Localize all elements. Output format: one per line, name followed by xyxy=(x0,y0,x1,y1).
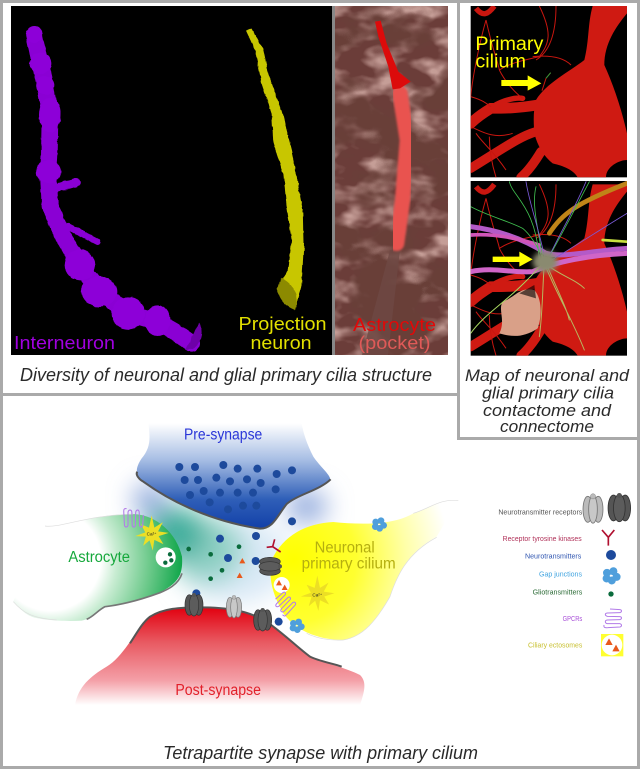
label: Primary cilium: cilium xyxy=(475,52,526,73)
glow: synaptic cleft xyxy=(133,483,327,603)
label: Primary cilium: Primary xyxy=(475,34,544,55)
panel: tetrapartite synapse xyxy=(13,423,631,763)
legend xyxy=(498,493,631,656)
panel: cilia structure diversity xyxy=(11,6,448,385)
legend row: gap junctions xyxy=(539,567,621,584)
label: Primary cilium xyxy=(475,34,544,73)
receptor: on cilium xyxy=(259,557,282,575)
label: Neuronal primary cilium xyxy=(302,539,396,573)
receptor tyrosine kinase xyxy=(267,539,281,552)
label: Projection neuron: Projection xyxy=(238,313,326,334)
legend row: neurotransmitters: Neurotransmitters xyxy=(525,552,581,561)
legend row: GPCRs: GPCRs xyxy=(563,614,582,623)
diagram: synapse xyxy=(13,423,458,705)
image: interneuron cilium xyxy=(26,26,202,350)
label: Neuronal primary cilium: primary cilium xyxy=(302,556,396,573)
gliotransmitters xyxy=(186,544,241,581)
label: Interneuron: Interneuron xyxy=(14,333,115,353)
caption: diversity: Diversity of neuronal and glial primary cilia structure xyxy=(20,365,432,385)
label: Astrocyte (pocket) xyxy=(353,315,436,353)
shape: post-synapse xyxy=(75,607,364,705)
shape: neuronal primary cilium xyxy=(270,500,458,640)
arrow: yellow xyxy=(501,75,541,91)
legend row: neurotransmitters xyxy=(525,550,616,561)
vesicle: ciliary ectosome xyxy=(274,577,290,593)
gap junction: bottom xyxy=(290,619,305,633)
label: Astrocyte (pocket): (pocket) xyxy=(358,333,430,353)
shape: pre-synapse xyxy=(137,423,330,529)
legend row: neurotransmitter receptors xyxy=(498,493,631,523)
image: neuron with primary cilium xyxy=(471,6,627,177)
GPCR: cilium xyxy=(271,591,297,617)
neurotransmitters: in cleft xyxy=(192,517,296,626)
calcium star: astrocyte xyxy=(135,515,169,551)
caption: contactome and connectome: connectome xyxy=(500,417,594,436)
image: projection neuron cilium xyxy=(246,28,304,310)
legend row: receptor tyrosine kinases: Receptor tyrosine kinases xyxy=(503,534,582,543)
caption: contactome and connectome xyxy=(465,366,630,436)
label: Pre-synapse: Pre-synapse xyxy=(184,427,262,444)
arrow: yellow xyxy=(493,252,533,267)
label: Post-synapse: Post-synapse xyxy=(175,682,261,699)
label: Projection neuron: neuron xyxy=(250,332,312,353)
caption: contactome and connectome: contactome and xyxy=(483,401,612,420)
calcium star: cilium xyxy=(301,576,334,611)
label: Projection neuron xyxy=(238,313,326,353)
calcium star: astrocyte: Ca²⁺ xyxy=(147,531,157,536)
legend row: ciliary ectosomes xyxy=(528,634,623,656)
image: astrocyte cilium in pocket xyxy=(375,21,411,243)
legend row: gliotransmitters: Gliotransmitters xyxy=(533,587,582,596)
legend row: receptor tyrosine kinases xyxy=(503,530,614,546)
label: Neuronal primary cilium: Neuronal xyxy=(315,539,375,556)
vesicle: astrocyte gliotransmitters xyxy=(156,547,176,567)
image: neuron with contact map xyxy=(471,181,627,356)
legend row: gap junctions: Gap junctions xyxy=(539,570,582,579)
shape: astrocyte xyxy=(13,514,182,621)
legend row: neurotransmitter receptors: Neurotransmitter receptors xyxy=(498,508,582,517)
calcium star: cilium: Ca²⁺ xyxy=(312,592,323,597)
legend row: ciliary ectosomes: Ciliary ectosomes xyxy=(528,641,582,650)
label: Astrocyte: Astrocyte xyxy=(68,549,130,566)
gap junction: top xyxy=(372,517,387,532)
panel: contactome and connectome map xyxy=(465,6,630,436)
caption: tetrapartite synapse: Tetrapartite synapse with primary cilium xyxy=(163,743,478,763)
legend row: GPCRs xyxy=(563,609,621,628)
GPCR: astrocyte xyxy=(124,509,143,527)
caption: contactome and connectome: glial primary cilia xyxy=(482,384,614,402)
image: black 3D reconstruction field xyxy=(11,6,332,355)
legend row: gliotransmitters xyxy=(533,587,614,597)
caption: contactome and connectome: Map of neuronal and xyxy=(465,366,630,385)
ectosome cargo: triangles xyxy=(237,558,245,578)
receptors: post-synaptic xyxy=(185,593,272,631)
neurotransmitters: vesicle pool xyxy=(175,461,296,513)
label: Astrocyte (pocket): Astrocyte xyxy=(353,315,436,335)
image: astrocyte tissue background xyxy=(332,6,448,355)
